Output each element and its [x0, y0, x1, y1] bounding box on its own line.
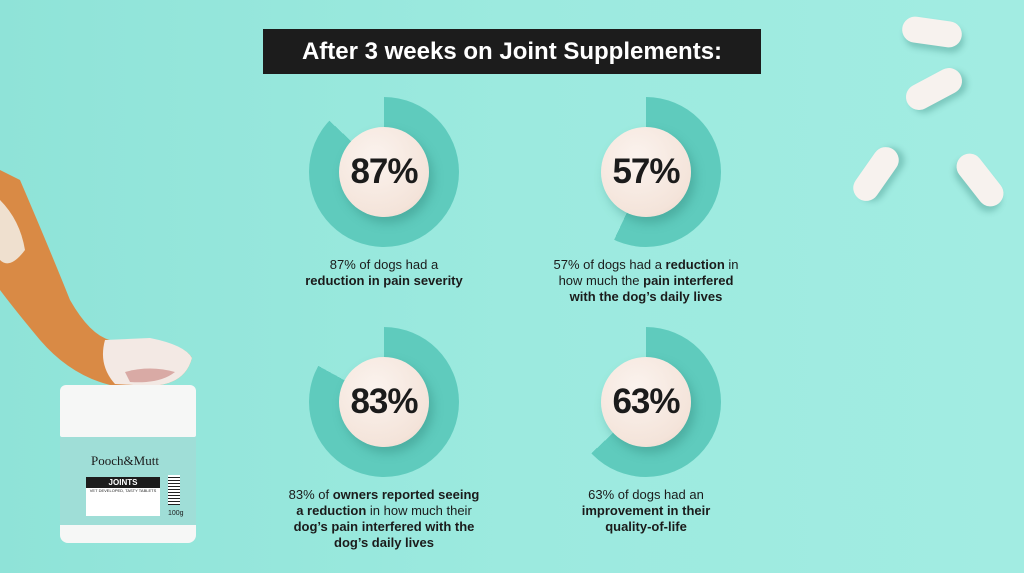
product jar [60, 385, 196, 543]
product jar: 100g [168, 510, 184, 517]
caption: 57%: 57% of dogs had a reduction in [554, 257, 738, 272]
donut: 57%: 57% [612, 152, 680, 191]
caption: 63%: quality-of-life [605, 519, 687, 534]
dog leg and paw [0, 170, 192, 385]
caption: 57%: with the dog’s daily lives [570, 289, 722, 304]
caption: 63%: 63% of dogs had an [588, 487, 704, 502]
donut: 63% [571, 327, 721, 477]
donut: 83%: 83% [350, 382, 418, 421]
donut: 57% [571, 97, 721, 247]
caption: 63%: improvement in their [582, 503, 710, 518]
caption: 83%: a reduction in how much their [296, 503, 472, 518]
caption: 57%: how much the pain interfered [559, 273, 733, 288]
donut: 63%: 63% [612, 382, 680, 421]
pills decoration [853, 16, 1004, 214]
caption: 63% [582, 487, 710, 534]
donut: 83% [309, 327, 459, 477]
title [263, 29, 761, 74]
title: After 3 weeks on Joint Supplements: [302, 38, 722, 65]
caption: 83%: dog’s pain interfered with the [294, 519, 474, 534]
product jar: VET DEVELOPED, TASTY TABLETS [90, 488, 156, 493]
caption: 83%: 83% of owners reported seeing [289, 487, 479, 502]
caption: 83%: dog’s daily lives [334, 535, 434, 550]
caption: 87%: 87% of dogs had a [330, 257, 438, 272]
product jar: JOINTS [109, 478, 137, 487]
donut: 87%: 87% [350, 152, 418, 191]
donut: 87% [309, 97, 459, 247]
caption: 57% [554, 257, 738, 304]
product jar: Pooch&Mutt [91, 453, 159, 468]
caption: 87%: reduction in pain severity [305, 273, 463, 288]
caption: 87% [305, 257, 463, 288]
caption: 83% [289, 487, 479, 550]
